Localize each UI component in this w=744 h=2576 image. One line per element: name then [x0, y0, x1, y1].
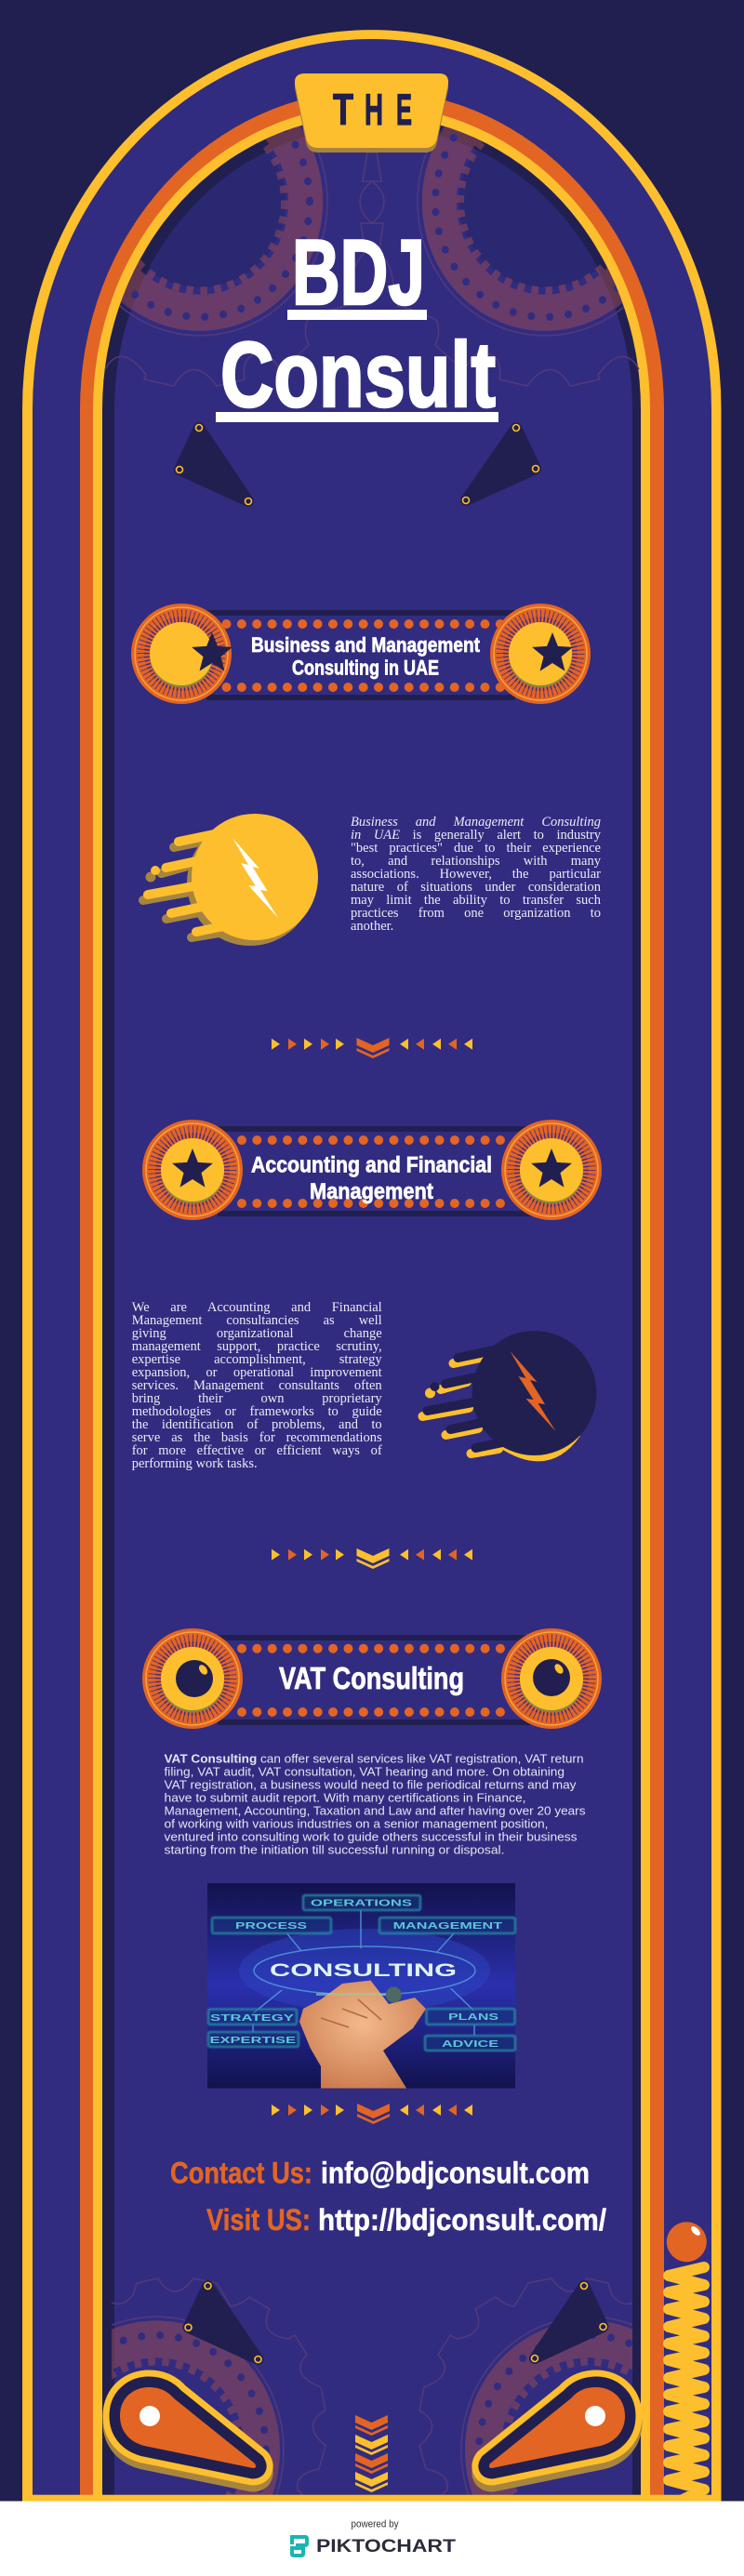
icon: piktochart logo — [292, 2537, 307, 2556]
section 2 body text: expertise accomplishment, strategy — [132, 1352, 382, 1367]
title: BDJ Consult: BDJ — [292, 220, 425, 324]
VAT body text: VAT Consulting can offer several services like VAT registration, VAT return — [164, 1751, 584, 1765]
section 2 body text: We are Accounting and Financial — [132, 1300, 382, 1315]
medallion left — [131, 604, 232, 704]
section 1 banner — [131, 604, 591, 704]
footer: powered by — [352, 2519, 399, 2530]
section 2 body text: services. Management consultants often — [132, 1378, 382, 1393]
section 2 body text: for more effective or efficient ways of — [132, 1443, 382, 1458]
section 1 body text: practices from one organization to — [351, 906, 601, 921]
contact line — [170, 2157, 590, 2190]
footer: PIKTOCHART — [316, 2537, 456, 2556]
VAT body text: VAT registration, a business would need to file periodical returns and may — [164, 1777, 577, 1791]
VAT body text: starting from the initiation till successful running or disposal. — [164, 1842, 504, 1856]
website line: http://bdjconsult.com/ — [318, 2203, 606, 2237]
section 1 body text: another. — [351, 919, 393, 934]
section 2 body text: performing work tasks. — [132, 1456, 258, 1471]
icon: yellow lightning ball — [143, 814, 318, 946]
section 3 banner — [142, 1628, 602, 1729]
consulting photo: EXPERTISE — [210, 2035, 296, 2046]
consulting photo: OPERATIONS — [311, 1897, 412, 1908]
consulting photo: PROCESS — [235, 1920, 307, 1932]
bumper plate: upper left — [177, 424, 251, 504]
flipper left — [120, 2387, 256, 2475]
badge: THE: E — [396, 85, 412, 134]
website line: Visit US: — [206, 2203, 311, 2237]
consulting photo: MANAGEMENT — [393, 1920, 503, 1932]
section 1 body text: to, and relationships with many — [351, 854, 601, 869]
section 3 divider — [272, 2104, 472, 2124]
consulting photo: CONSULTING — [270, 1960, 457, 1981]
VAT body text: Management, Accounting, Taxation and Law and after having over 20 years — [164, 1803, 586, 1817]
section 2 body text: bring their own proprietary — [132, 1391, 382, 1406]
section 1 body text: associations. However, the particular — [351, 867, 601, 882]
bumper plate: lower right — [532, 2282, 606, 2362]
VAT body text — [164, 1751, 586, 1856]
VAT body text: have to submit audit report. With many certifications in Finance, — [164, 1790, 526, 1804]
section 1 heading — [251, 633, 480, 679]
section 2 heading — [251, 1153, 492, 1204]
bumper plate: lower left — [185, 2282, 261, 2362]
badge: THE: T — [333, 85, 353, 134]
section 2 divider — [272, 1548, 472, 1569]
section 1 body text: Business and Management Consulting — [351, 815, 601, 830]
medallion right — [490, 604, 591, 704]
section 2 body text: serve as the basis for recommendations — [132, 1430, 382, 1445]
medallion right eye — [501, 1628, 602, 1729]
medallion right — [501, 1120, 602, 1220]
badge: THE: H — [365, 85, 383, 134]
section 3 heading: VAT Consulting — [279, 1662, 464, 1696]
section 1 heading: Business and Management — [251, 633, 480, 657]
spring — [669, 2267, 704, 2502]
ball — [667, 2222, 707, 2262]
flipper right — [489, 2387, 625, 2475]
section 2 body text: methodologies or frameworks to guide — [132, 1404, 382, 1419]
section 2 body text: Management consultancies as well — [132, 1313, 382, 1328]
VAT body text: of working with various industries on a senior management position, — [164, 1816, 549, 1830]
gear outlines top — [105, 153, 639, 386]
lower gears — [112, 2277, 632, 2495]
section 2 body text: management support, practice scrutiny, — [132, 1339, 382, 1354]
bottom chevrons — [355, 2415, 388, 2492]
section 1 divider — [272, 1038, 472, 1058]
medallion left — [142, 1120, 243, 1220]
VAT body text: ventured into consulting work to guide others successful in their business — [164, 1829, 578, 1843]
section 2 body text — [132, 1300, 382, 1471]
medallion left eye — [142, 1628, 243, 1729]
section 1 body text: in UAE is generally alert to industry — [351, 828, 601, 843]
consulting photo: ADVICE — [442, 2038, 498, 2050]
bottom frame bar — [22, 2495, 722, 2502]
section 2 heading: Management — [310, 1179, 433, 1204]
website line — [206, 2203, 606, 2237]
section 1 body text: may limit the ability to transfer such — [351, 893, 601, 908]
section 2 banner — [142, 1120, 602, 1220]
icon: dark lightning ball — [422, 1331, 597, 1461]
bumper plate: upper right — [463, 424, 539, 504]
section 1 heading: Consulting in UAE — [292, 657, 439, 679]
contact line: Contact Us: — [170, 2157, 312, 2190]
badge: THE — [295, 73, 448, 153]
section 2 body text: the identification of problems, and to — [132, 1417, 382, 1432]
footer — [0, 2502, 744, 2576]
section 1 body text: nature of situations under consideration — [351, 880, 601, 895]
section 1 body text — [351, 815, 601, 934]
section 2 body text: giving organizational change — [132, 1326, 382, 1341]
title: BDJ Consult — [216, 220, 498, 426]
consulting photo — [207, 1883, 515, 2089]
section 2 heading: Accounting and Financial — [251, 1153, 492, 1178]
top gears — [119, 125, 624, 337]
VAT body text: filing, VAT audit, VAT consultation, VAT hearing and more. On obtaining — [164, 1764, 565, 1778]
consulting photo: PLANS — [448, 2012, 498, 2023]
section 2 body text: expansion, or operational improvement — [132, 1365, 382, 1380]
consulting photo: STRATEGY — [210, 2012, 294, 2024]
title: BDJ Consult: Consult — [220, 323, 496, 426]
contact line: info@bdjconsult.com — [321, 2157, 590, 2190]
section 1 body text: "best practices" due to their experience — [351, 841, 601, 856]
